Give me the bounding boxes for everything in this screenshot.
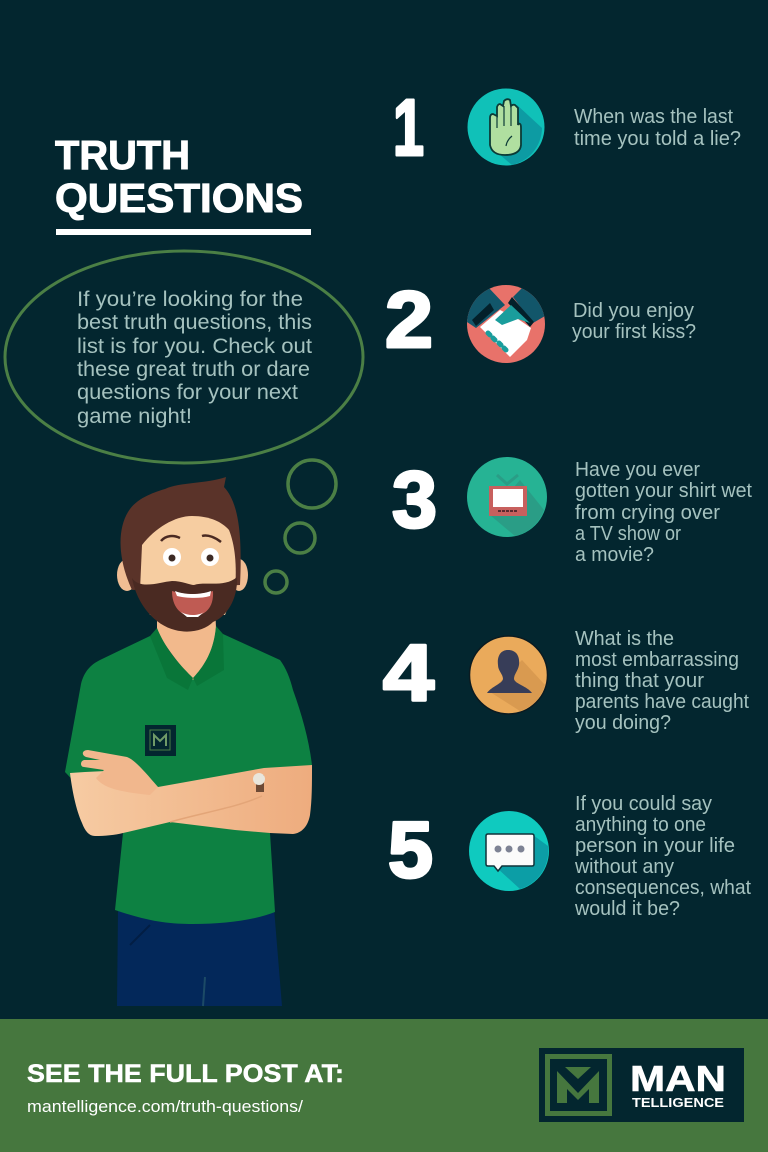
footer call to action: SEE THE FULL POST AT: xyxy=(27,1060,344,1088)
item 5 xyxy=(388,793,751,920)
mouth xyxy=(172,591,213,616)
question 4: most embarrassing xyxy=(575,649,739,671)
title: QUESTIONS xyxy=(55,175,303,221)
item 4 xyxy=(383,628,749,734)
neck xyxy=(157,605,216,680)
character: bearded man in green polo xyxy=(65,477,312,1006)
collar xyxy=(150,626,224,690)
title xyxy=(55,132,311,235)
number 1: 1 xyxy=(393,83,424,172)
speech bubble: If you’re looking for the xyxy=(77,288,303,311)
eyebrows xyxy=(161,535,221,542)
question 3: gotten your shirt wet xyxy=(575,480,752,502)
question 5: anything to one xyxy=(575,814,706,836)
logo: TELLIGENCE xyxy=(632,1095,724,1110)
question 2: your first kiss? xyxy=(572,321,696,343)
question 4: you doing? xyxy=(575,712,671,734)
ears xyxy=(117,559,137,591)
thought bubbles xyxy=(265,460,336,593)
item 1 xyxy=(393,83,741,172)
icon: television xyxy=(467,457,547,537)
question 4: What is the xyxy=(575,628,674,650)
title: TRUTH xyxy=(55,132,190,178)
question 4: parents have caught xyxy=(575,691,749,713)
question 3: from crying over xyxy=(575,502,720,524)
icon: chat bubble xyxy=(469,811,549,891)
question 5: If you could say xyxy=(575,793,712,815)
question 2 xyxy=(572,300,696,343)
question 5: person in your life xyxy=(575,835,735,857)
beard xyxy=(132,577,237,632)
question 5: without any xyxy=(574,856,674,878)
speech bubble: questions for your next xyxy=(77,381,298,404)
item 3 xyxy=(392,455,752,566)
icon: hand xyxy=(468,88,544,166)
question 5 xyxy=(574,793,751,920)
number 2: 2 xyxy=(385,275,433,364)
question 3: a movie? xyxy=(575,544,654,566)
crossed arms xyxy=(70,765,312,836)
speech bubble xyxy=(5,251,363,463)
question 1: time you told a lie? xyxy=(574,128,741,150)
icon: person silhouette xyxy=(470,636,548,714)
watch xyxy=(253,773,265,792)
icon: handshake xyxy=(467,285,545,363)
pants xyxy=(117,908,282,1006)
question 4 xyxy=(575,628,749,734)
number 4: 4 xyxy=(383,628,435,717)
question 1: When was the last xyxy=(574,106,733,128)
speech bubble: these great truth or dare xyxy=(77,358,310,381)
badge logo xyxy=(145,725,176,756)
question 5: consequences, what xyxy=(575,877,751,899)
logo: MAN xyxy=(630,1058,726,1099)
speech bubble: best truth questions, this xyxy=(77,311,312,334)
question 1 xyxy=(574,106,741,150)
footer url: mantelligence.com/truth-questions/ xyxy=(27,1097,303,1116)
footer band xyxy=(0,1019,768,1152)
logo xyxy=(539,1048,744,1122)
speech bubble: list is for you. Check out xyxy=(77,335,312,358)
item 2 xyxy=(386,285,696,363)
question 4: thing that your xyxy=(575,670,704,692)
number 3: 3 xyxy=(392,455,437,544)
question 3: Have you ever xyxy=(575,459,700,481)
eyes xyxy=(163,548,181,566)
question 3: a TV show or xyxy=(575,523,681,545)
question 5: would it be? xyxy=(574,898,680,920)
shirt xyxy=(65,634,312,924)
hand xyxy=(81,750,158,795)
number 5: 5 xyxy=(388,805,433,894)
question 2: Did you enjoy xyxy=(573,300,694,322)
face xyxy=(140,516,236,615)
hair xyxy=(121,477,241,590)
question 3 xyxy=(575,459,752,566)
speech bubble: game night! xyxy=(77,405,192,428)
